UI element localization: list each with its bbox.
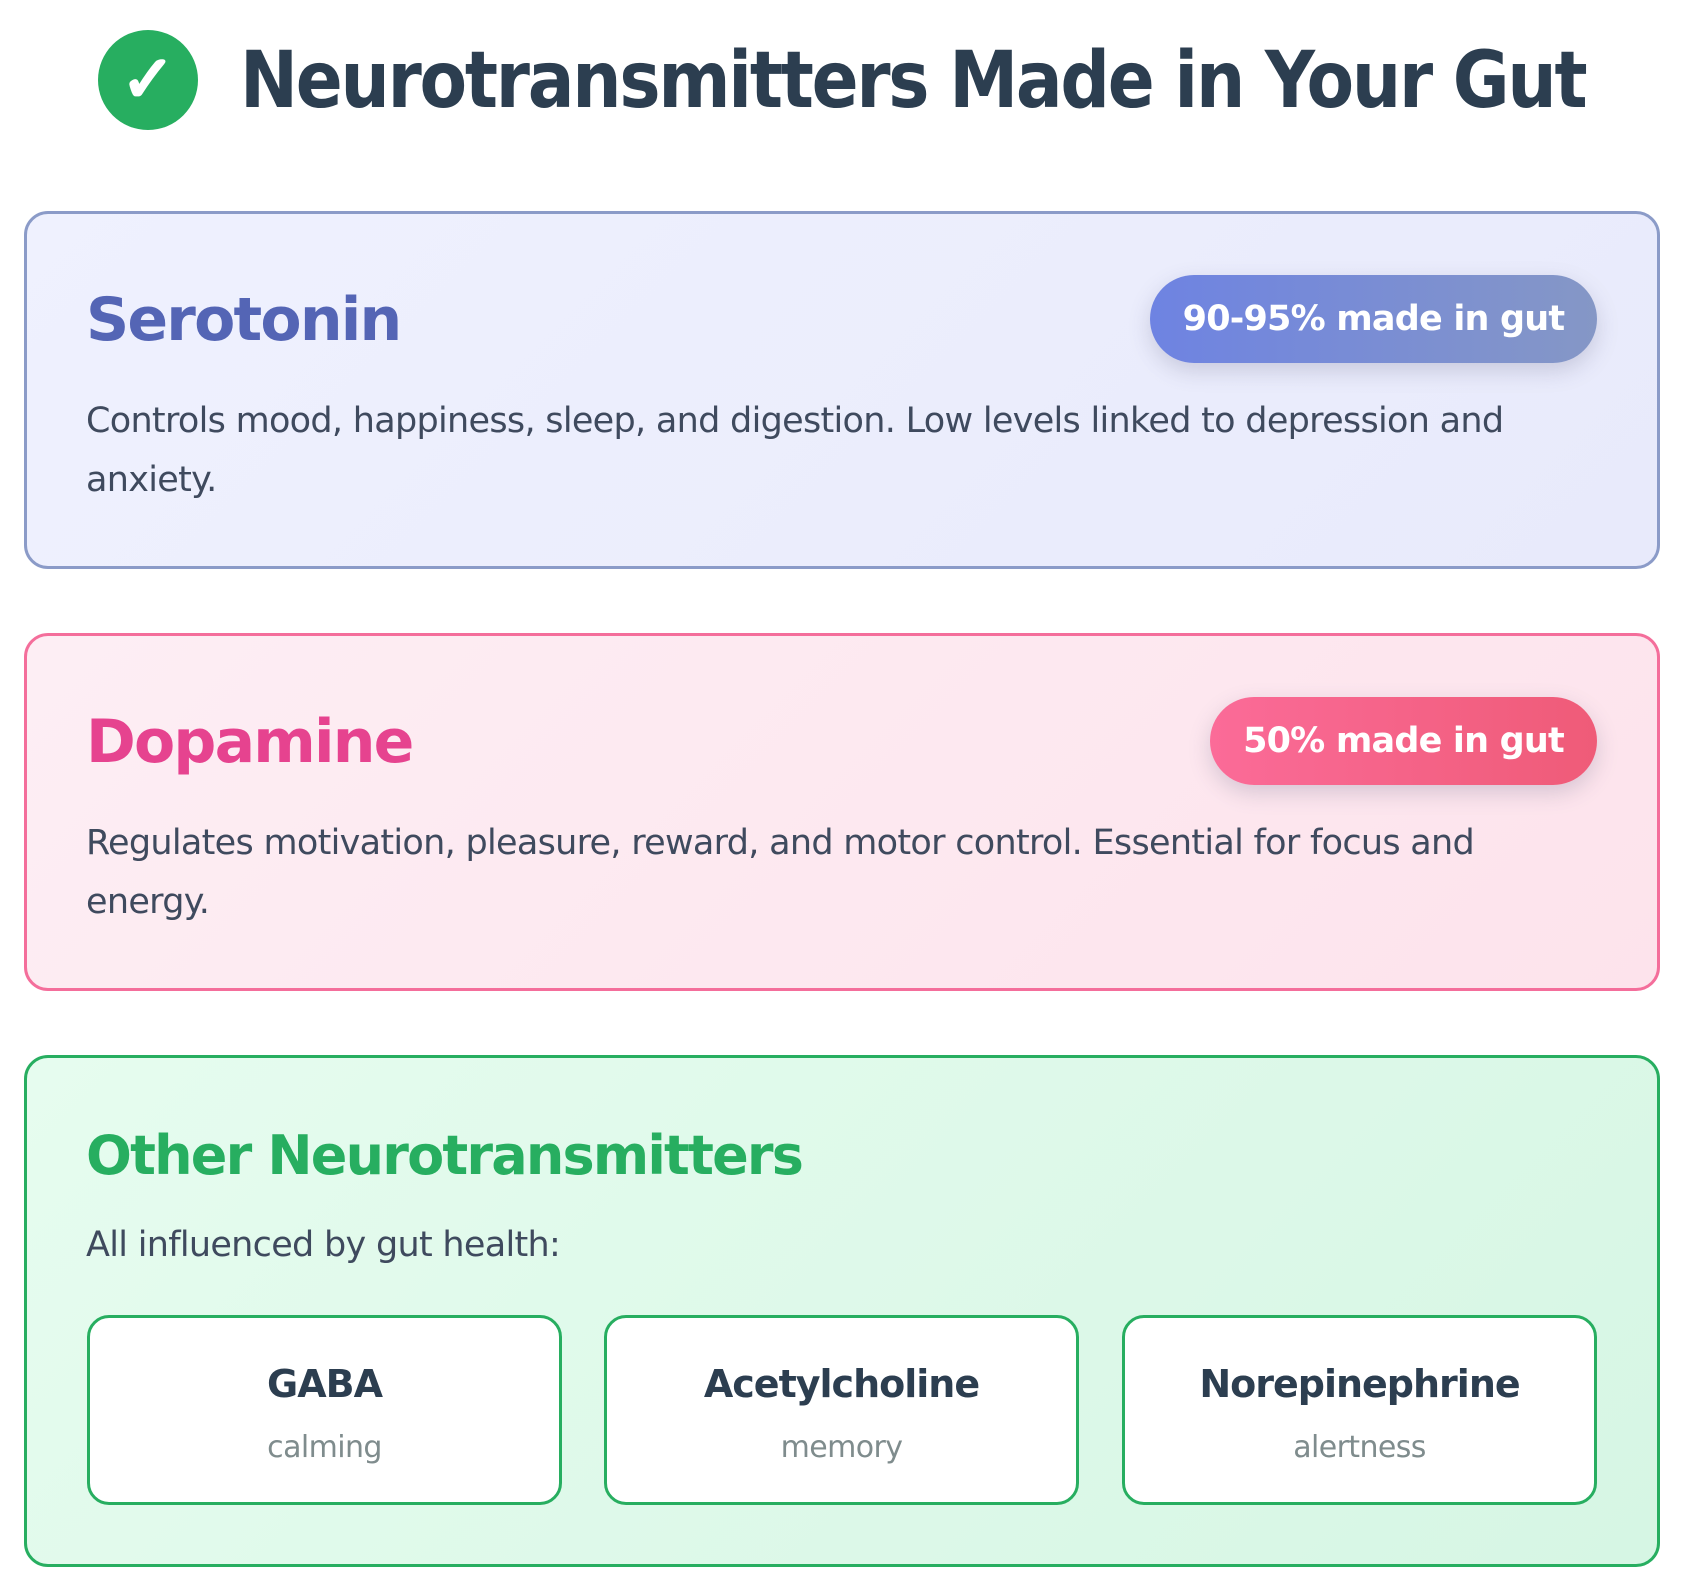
icon: green check circle: ✓ (121, 43, 175, 117)
icon: green check circle (98, 30, 198, 130)
badge: 50% (1210, 697, 1597, 785)
text: intro: All influenced by gut health: (86, 1225, 560, 1265)
panel: serotonin (24, 211, 1660, 569)
heading: serotonin: Serotonin (86, 285, 400, 355)
title text: Neurotransmitters Made in Your Gut (240, 36, 1585, 126)
card: Norepinephrine: Norepinephrine (1199, 1362, 1520, 1406)
card: Norepinephrine: alertness (1293, 1430, 1426, 1465)
heading: other: Other Neurotransmitters (86, 1124, 802, 1187)
card: Norepinephrine (1122, 1315, 1597, 1505)
card: GABA: GABA (267, 1362, 382, 1406)
badge: 90-95%: 90-95% made in gut (1183, 299, 1564, 339)
card: GABA: calming (267, 1430, 382, 1465)
heading: dopamine: Dopamine (86, 707, 413, 777)
badge: 90-95% (1150, 275, 1597, 363)
badge: 50%: 50% made in gut (1243, 721, 1564, 761)
panel: other neurotransmitters (24, 1055, 1660, 1567)
card: Acetylcholine (604, 1315, 1079, 1505)
title (98, 30, 1586, 130)
text: dopamine description: Regulates motivation, pleasure, reward, and motor control. Essential for focus and energy. (86, 823, 1474, 922)
card: GABA (87, 1315, 562, 1505)
card: Acetylcholine: memory (781, 1430, 902, 1465)
card: Acetylcholine: Acetylcholine (704, 1362, 979, 1406)
text: serotonin description: Controls mood, happiness, sleep, and digestion. Low levels linked to depression and anxiety. (86, 401, 1503, 500)
panel: dopamine (24, 633, 1660, 991)
